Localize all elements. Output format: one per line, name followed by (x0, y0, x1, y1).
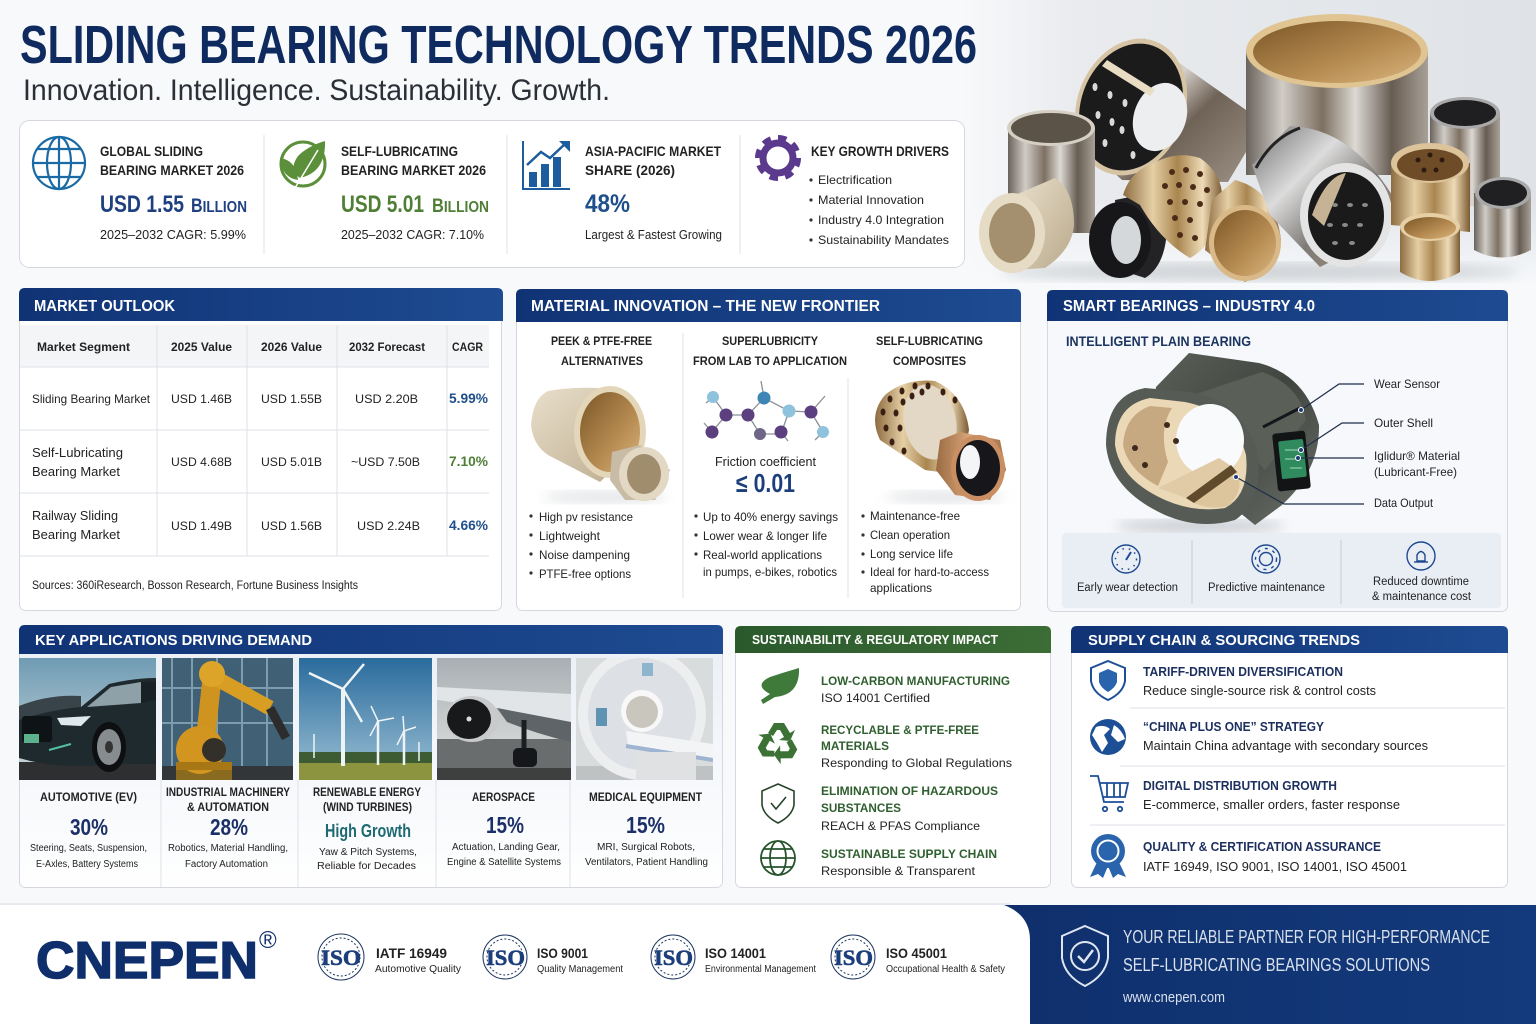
heading: market outlook (19, 288, 503, 321)
hero image: bearing collection (979, 14, 1531, 282)
kpi: growth drivers: KEY GROWTH DRIVERS (811, 143, 949, 159)
application: renewable energy: RENEWABLE ENERGY (313, 785, 421, 799)
kpi: global market (100, 143, 247, 242)
application: automotive: 30% (70, 814, 108, 840)
bullets: PTFE-free options (539, 567, 631, 581)
benefits strip: Reduced downtime (1373, 576, 1469, 588)
application: industrial machinery: 28% (210, 814, 248, 840)
application: medical equipment: MRI, Surgical Robots, (597, 842, 695, 853)
column: superlubricity: Friction coefficient (715, 454, 816, 469)
kpi: global market: USD 1.55 (100, 191, 184, 218)
subtitle: Innovation. Intelligence. Sustainability. Growth. (23, 74, 610, 107)
icon: gear (759, 139, 797, 177)
table: market segments: CAGR (452, 340, 483, 354)
item: tariff diversification: Reduce single-source risk & control costs (1143, 683, 1376, 698)
application: automotive: E-Axles, Battery Systems (36, 859, 138, 870)
bullets: Up to 40% energy savings (703, 510, 838, 524)
certification: ISO 9001: Quality Management (537, 964, 623, 975)
column: PEEK alternatives: ALTERNATIVES (561, 354, 643, 368)
application: aerospace: Engine & Satellite Systems (447, 857, 561, 868)
panel: key figures (20, 120, 964, 268)
footer: brand and certifications (0, 903, 1536, 1024)
item: sustainable supply chain: Responsible & Transparent (821, 864, 976, 878)
image: PEEK bearing (531, 386, 670, 503)
benefits strip: & maintenance cost (1372, 591, 1472, 603)
column: superlubricity: SUPERLUBRICITY (722, 334, 818, 348)
application: renewable energy: High Growth (325, 821, 411, 841)
callout labels: Iglidur® Material (1374, 449, 1460, 463)
application: aerospace: AEROSPACE (472, 790, 535, 804)
panel: sustainability (735, 626, 1051, 888)
table: market segments: USD 2.20B (355, 392, 418, 406)
certification: IATF: ISO (321, 945, 361, 970)
certification: IATF: Automotive Quality (375, 964, 461, 975)
bullets: Ideal for hard-to-access (870, 565, 989, 579)
icon: ribbon (1090, 834, 1126, 878)
heading: key applications: KEY APPLICATIONS DRIVING DEMAND (35, 632, 312, 649)
kpi: self-lubricating market: BEARING MARKET 2026 (341, 162, 486, 178)
item: digital distribution: E-commerce, smaller orders, faster response (1143, 797, 1400, 812)
icon: growth chart (523, 141, 570, 189)
application: automotive (19, 658, 156, 870)
application: automotive: Steering, Seats, Suspension, (30, 843, 147, 854)
heading: supply chain (1071, 626, 1508, 653)
bullets (529, 510, 633, 581)
item: recyclable materials: MATERIALS (821, 739, 889, 753)
certification: ISO 45001: Occupational Health & Safety (886, 964, 1005, 975)
certification: ISO 45001 (831, 935, 1005, 979)
callout labels: (Lubricant-Free) (1374, 465, 1457, 479)
kpi: growth drivers: Industry 4.0 Integration (818, 213, 944, 227)
bullets: applications (870, 581, 932, 595)
icon: shield (1091, 661, 1125, 700)
heading: material innovation (516, 289, 1021, 322)
item: recyclable materials: RECYCLABLE & PTFE-FREE (821, 723, 979, 737)
subheading: INTELLIGENT PLAIN BEARING (1066, 333, 1251, 349)
icon: leaf (761, 668, 799, 704)
item: quality assurance: QUALITY & CERTIFICATION ASSURANCE (1143, 839, 1381, 854)
image: electric car (19, 658, 156, 780)
application: renewable energy: Yaw & Pitch Systems, (319, 847, 417, 858)
kpi: self-lubricating market: SELF-LUBRICATING (341, 143, 458, 159)
panel: key applications (19, 625, 723, 888)
callout labels: Wear Sensor (1374, 377, 1440, 391)
certification: IATF (318, 934, 461, 980)
kpi: self-lubricating market (341, 143, 489, 242)
heading: smart bearings (1047, 290, 1508, 321)
application: renewable energy (299, 658, 432, 872)
panel: supply chain (1071, 626, 1508, 888)
bullets: in pumps, e-bikes, robotics (703, 565, 837, 579)
heading: key applications (19, 625, 723, 654)
certification: IATF: IATF 16949 (376, 945, 447, 961)
item: recyclable materials: Responding to Global Regulations (821, 756, 1012, 770)
kpi: growth drivers (809, 143, 949, 247)
heading: sustainability: SUSTAINABILITY & REGULATORY IMPACT (752, 632, 998, 647)
item: hazardous substances: SUBSTANCES (821, 801, 901, 815)
image: aircraft engine (437, 658, 571, 780)
sources note: Sources: 360iResearch, Bosson Research, Fortune Business Insights (32, 580, 358, 592)
callout labels (1374, 377, 1460, 510)
icon: shield check (762, 784, 794, 823)
item: china plus one (1090, 719, 1428, 755)
icon: recycle (752, 723, 800, 768)
logo: CNEPEN (36, 932, 258, 990)
certification: ISO 14001 (651, 935, 816, 979)
column: PEEK alternatives: PEEK & PTFE-FREE (551, 334, 652, 348)
benefits strip (1062, 533, 1501, 608)
title: SLIDING BEARING TECHNOLOGY TRENDS 2026 (20, 15, 977, 75)
certification: ISO 9001: ISO 9001 (537, 945, 588, 961)
icon: leaf (280, 141, 325, 188)
image: composite bearing (875, 379, 1006, 503)
table: market segments: Market Segment (37, 340, 130, 354)
kpi: global market: GLOBAL SLIDING (100, 143, 203, 159)
callout labels: Data Output (1374, 496, 1434, 510)
icon: shield check (1062, 926, 1108, 986)
bullets: Lightweight (539, 529, 601, 543)
heading: sustainability (735, 626, 1051, 653)
table: market segments: USD 1.49B (171, 519, 232, 533)
partner text (1122, 927, 1490, 1006)
heading: smart bearings: SMART BEARINGS – INDUSTRY 4.0 (1063, 298, 1315, 315)
certification: ISO 9001: ISO (486, 945, 525, 970)
bullets (694, 510, 838, 579)
application: automotive: AUTOMOTIVE (EV) (40, 790, 137, 804)
icon: globe (761, 841, 795, 875)
bullets: High pv resistance (539, 510, 633, 524)
application: industrial machinery (162, 658, 293, 870)
certification: ISO 14001: ISO (654, 945, 693, 970)
item: digital distribution (1090, 776, 1400, 812)
table: market segments: USD 4.68B (171, 455, 232, 469)
certification: ISO 14001: Environmental Management (705, 964, 816, 975)
application: medical equipment: Ventilators, Patient Handling (585, 857, 708, 868)
kpi: growth drivers: Electrification (818, 173, 892, 187)
application: aerospace: Actuation, Landing Gear, (452, 842, 560, 853)
callout lines (1234, 384, 1364, 504)
column: composites: COMPOSITES (893, 354, 966, 368)
table: market segments: 4.66% (449, 517, 489, 533)
kpi: asia-pacific share: ASIA-PACIFIC MARKET (585, 143, 721, 159)
item: low-carbon manufacturing: LOW-CARBON MANUFACTURING (821, 674, 1010, 688)
column: composites (861, 334, 1006, 595)
application: renewable energy: Reliable for Decades (317, 861, 416, 872)
column: superlubricity: FROM LAB TO APPLICATION (693, 354, 847, 368)
bullets: Clean operation (870, 528, 950, 542)
item: sustainable supply chain (761, 841, 997, 878)
kpi: self-lubricating market: USD 5.01 (341, 191, 424, 218)
item: tariff diversification: TARIFF-DRIVEN DIVERSIFICATION (1143, 664, 1343, 679)
table: market segments: Railway Sliding (32, 508, 118, 523)
kpi: growth drivers: Material Innovation (818, 193, 924, 207)
callout labels: Outer Shell (1374, 416, 1433, 430)
kpi: asia-pacific share: SHARE (2026) (585, 162, 675, 178)
logo: ® (259, 927, 277, 954)
table: market segments: Bearing Market (32, 464, 120, 479)
image: intelligent bearing (1106, 353, 1319, 532)
item: china plus one: Maintain China advantage with secondary sources (1143, 738, 1428, 753)
icon: molecule (704, 381, 829, 441)
image: MRI scanner (576, 658, 713, 780)
kpi: asia-pacific share (585, 143, 722, 242)
table: market segments: 2032 Forecast (349, 340, 425, 354)
kpi: global market: BEARING MARKET 2026 (100, 162, 244, 178)
certification: ISO 9001 (483, 935, 623, 979)
bullets: Lower wear & longer life (703, 529, 827, 543)
kpi: self-lubricating market: 2025–2032 CAGR: 7.10% (341, 227, 484, 242)
column: PEEK alternatives (529, 334, 670, 581)
image: wind turbines (299, 658, 432, 780)
table: market segments: USD 1.56B (261, 519, 322, 533)
kpi: asia-pacific share: 48% (585, 190, 630, 218)
heading: market outlook: MARKET OUTLOOK (34, 298, 175, 315)
table: market segments: 7.10% (449, 453, 489, 469)
icon: gauge (1112, 545, 1140, 573)
application: medical equipment: 15% (626, 812, 665, 838)
image: robot arm (162, 658, 293, 780)
icon: earth globe (1090, 719, 1126, 755)
certification: ISO 45001: ISO (834, 945, 873, 970)
table: market segments: Self-Lubricating (32, 445, 123, 460)
kpi: growth drivers: Sustainability Mandates (818, 233, 949, 247)
icon: maintenance (1252, 545, 1280, 573)
table: market segments: 2026 Value (261, 340, 322, 354)
item: low-carbon manufacturing: ISO 14001 Certified (821, 691, 930, 705)
heading: supply chain: SUPPLY CHAIN & SOURCING TRENDS (1088, 632, 1360, 649)
table: market segments: 2025 Value (171, 340, 232, 354)
item: digital distribution: DIGITAL DISTRIBUTION GROWTH (1143, 778, 1337, 793)
table: market segments: USD 2.24B (357, 519, 420, 533)
table: market segments (20, 325, 489, 556)
panel: smart bearings (1047, 290, 1508, 612)
bullets: Maintenance-free (870, 509, 960, 523)
item: hazardous substances (762, 784, 998, 833)
table: market segments: USD 1.46B (171, 392, 232, 406)
bullets: Long service life (870, 547, 953, 561)
item: quality assurance (1090, 834, 1407, 878)
panel: market outlook (19, 288, 503, 610)
item: hazardous substances: ELIMINATION OF HAZARDOUS (821, 784, 998, 798)
certification: ISO 14001: ISO 14001 (705, 945, 766, 961)
table: market segments: USD 1.55B (261, 392, 322, 406)
application: medical equipment (576, 648, 713, 868)
bullets (861, 509, 989, 595)
application: medical equipment: MEDICAL EQUIPMENT (589, 790, 703, 804)
item: tariff diversification (1091, 661, 1376, 700)
panel: material innovation (516, 289, 1021, 610)
icon: cart (1090, 776, 1128, 811)
column: superlubricity: ≤ 0.01 (736, 468, 795, 498)
benefits strip: Predictive maintenance (1208, 582, 1325, 594)
application: aerospace (437, 658, 571, 868)
table: market segments: Sliding Bearing Market (32, 392, 151, 406)
heading: material innovation: MATERIAL INNOVATION – THE NEW FRONTIER (531, 298, 880, 315)
column: superlubricity (693, 334, 847, 579)
certification: ISO 45001: ISO 45001 (886, 945, 947, 961)
partner text: www.cnepen.com (1122, 989, 1225, 1006)
item: quality assurance: IATF 16949, ISO 9001, ISO 14001, ISO 45001 (1143, 859, 1407, 874)
table: market segments: USD 5.01B (261, 455, 322, 469)
kpi: self-lubricating market: BILLION (432, 196, 489, 217)
item: low-carbon manufacturing (761, 668, 1010, 705)
table: market segments: Bearing Market (32, 527, 120, 542)
table: market segments: 5.99% (449, 390, 489, 406)
icon: globe (33, 137, 85, 189)
application: industrial machinery: Robotics, Material Handling, (168, 843, 288, 854)
application: industrial machinery: INDUSTRIAL MACHINERY (166, 785, 290, 799)
application: industrial machinery: & AUTOMATION (187, 800, 269, 814)
application: aerospace: 15% (486, 812, 524, 838)
bullets: Noise dampening (539, 548, 630, 562)
kpi: global market: 2025–2032 CAGR: 5.99% (100, 227, 246, 242)
item: recyclable materials (752, 723, 1012, 770)
column: composites: SELF-LUBRICATING (876, 334, 983, 348)
bullets: Real-world applications (703, 548, 822, 562)
kpi: global market: BILLION (191, 196, 247, 217)
kpi: asia-pacific share: Largest & Fastest Growing (585, 227, 722, 242)
footer: partner banner (1004, 905, 1536, 1024)
table: market segments: ~USD 7.50B (351, 455, 420, 469)
item: sustainable supply chain: SUSTAINABLE SUPPLY CHAIN (821, 847, 997, 861)
benefits strip: Early wear detection (1077, 582, 1178, 594)
application: industrial machinery: Factory Automation (185, 859, 268, 870)
item: hazardous substances: REACH & PFAS Compliance (821, 819, 980, 833)
item: china plus one: “CHINA PLUS ONE” STRATEGY (1143, 719, 1324, 734)
icon: alarm (1407, 542, 1435, 570)
partner text: SELF-LUBRICATING BEARINGS SOLUTIONS (1123, 955, 1430, 975)
application: renewable energy: (WIND TURBINES) (323, 800, 412, 814)
